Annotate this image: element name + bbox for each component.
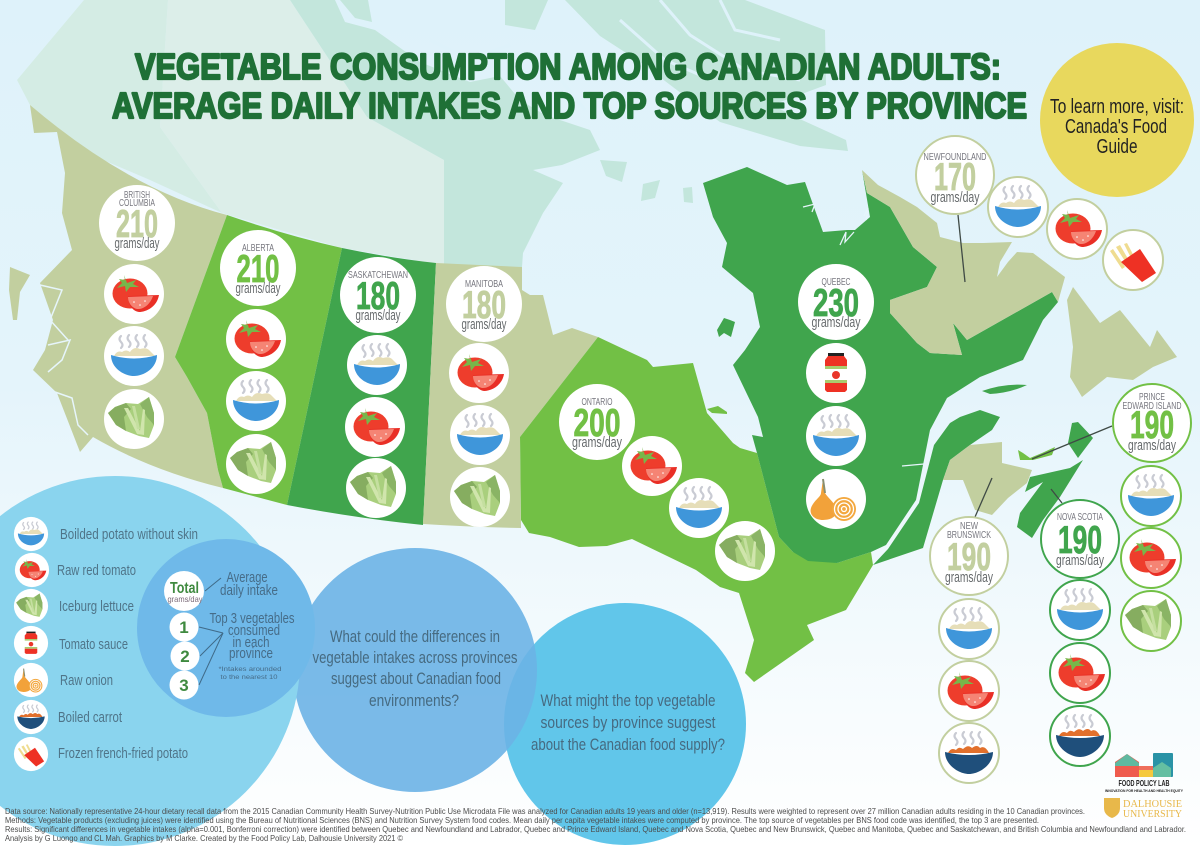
province: British Columbia	[9, 105, 227, 488]
key: connector lines	[199, 578, 223, 685]
icon: lettuce	[104, 389, 164, 449]
Akimiski island	[707, 406, 727, 414]
legend item: tomato sauce: Tomato sauce	[59, 637, 128, 653]
icon: boiled potato	[939, 599, 999, 659]
legend item: french fries	[14, 737, 188, 771]
panel: how to read	[137, 539, 315, 717]
key: rounding note: *Intakes arounded	[218, 666, 282, 673]
stat: Ontario total	[559, 384, 635, 460]
icon: boiled potato	[1121, 466, 1181, 526]
stat: Ontario total: 200	[574, 402, 620, 445]
stat: Alberta total	[220, 230, 296, 306]
province: Newfoundland and Labrador	[862, 170, 1177, 397]
question two text: about the Canadian food supply?	[531, 736, 725, 754]
stat: British Columbia total: 210	[116, 203, 158, 246]
stat: Newfoundland total: NEWFOUNDLAND	[923, 151, 987, 163]
question two text	[531, 692, 725, 754]
key: top 3 vegetables text: Top 3 vegetables	[210, 611, 294, 627]
panel: question two	[504, 603, 746, 845]
stat: New Brunswick total: BRUNSWICK	[947, 529, 991, 541]
legend item: onion: Raw onion	[60, 673, 113, 689]
logo: Food Policy Lab: INNOVATION FOR HEALTH AND HEALTH EQUITY	[1105, 788, 1183, 793]
stat: British Columbia total: COLUMBIA	[119, 197, 155, 209]
province: Saskatchewan	[287, 248, 436, 525]
legend item: onion	[14, 663, 113, 697]
panel: Quebec	[798, 264, 874, 529]
icon: boiled potato	[226, 371, 286, 431]
callout: Canada's Food Guide: Guide	[1096, 136, 1138, 158]
legend item: tomato: Raw red tomato	[57, 563, 136, 579]
leader lines to Atlantic provinces	[958, 215, 1112, 517]
stat: Saskatchewan total: SASKATCHEWAN	[348, 269, 408, 281]
footnotes	[5, 806, 1186, 843]
callout: Canada's Food Guide: Canada's Food	[1065, 116, 1167, 138]
legend item: carrot	[14, 700, 122, 734]
Quebec rivers	[803, 204, 924, 466]
panel: question one: vegetable intakes across provinces	[312, 649, 518, 667]
province: Nova Scotia	[1017, 422, 1093, 538]
legend item: carrot: Boiled carrot	[58, 710, 122, 726]
icon: lettuce	[715, 521, 775, 581]
map of Canada	[9, 0, 1177, 682]
icon: boiled carrot	[939, 723, 999, 783]
legend item: lettuce	[14, 589, 134, 623]
icon: tomato	[449, 343, 509, 403]
panel: British Columbia	[99, 185, 175, 449]
panel: Saskatchewan	[340, 257, 416, 518]
stat: British Columbia total	[99, 185, 175, 261]
key: average daily intake text: Average	[226, 570, 268, 586]
logo: Dalhousie University: UNIVERSITY	[1123, 809, 1182, 820]
stat: Newfoundland total: 170	[934, 156, 976, 199]
province: Manitoba	[423, 263, 598, 528]
stat: Alberta total: 210	[236, 248, 280, 291]
water channels in the Arctic	[430, 0, 800, 110]
territory: Yukon	[17, 0, 222, 213]
key: average daily intake text	[220, 570, 278, 599]
icon: boiled carrot	[1050, 706, 1110, 766]
logo: Food Policy Lab	[1105, 753, 1183, 793]
icon: tomato sauce	[806, 343, 866, 403]
stat: Newfoundland total: grams/day	[930, 189, 980, 206]
icon: tomato	[104, 264, 164, 324]
province: Alberta	[175, 215, 342, 505]
legend item: boiled potato	[14, 517, 198, 551]
province: Prince Edward Island	[1018, 447, 1055, 460]
legend item: tomato	[15, 553, 136, 587]
key: rounding note: to the nearest 10	[220, 674, 278, 681]
icon: tomato	[622, 436, 682, 496]
stat: Manitoba total: grams/day	[462, 316, 507, 333]
stat: Ontario total: ONTARIO	[582, 396, 612, 408]
stat: Quebec total: grams/day	[812, 314, 861, 331]
question two text: What might the top vegetable	[540, 692, 716, 710]
stat: PEI total: PRINCE	[1139, 391, 1165, 403]
icon: onion	[806, 469, 866, 529]
stat: Quebec total	[798, 264, 874, 340]
key: rounding note	[218, 666, 282, 681]
stat: Nova Scotia total: grams/day	[1056, 552, 1104, 569]
key: rank circles: 3	[179, 676, 189, 695]
stat: New Brunswick total: 190	[947, 536, 991, 579]
icon: boiled potato	[104, 326, 164, 386]
stat: Nova Scotia total: 190	[1058, 519, 1102, 562]
key: top 3 vegetables text: in each	[232, 635, 270, 651]
panel: Newfoundland	[916, 136, 1163, 290]
panel: Alberta	[220, 230, 296, 494]
panel: question one: What could the differences in	[330, 628, 500, 646]
stat: Saskatchewan total: grams/day	[356, 307, 401, 324]
icon: boiled potato	[669, 478, 729, 538]
icon: lettuce	[346, 458, 406, 518]
stat: PEI total: grams/day	[1128, 437, 1176, 454]
icon: boiled potato	[988, 177, 1048, 237]
title: AVERAGE DAILY INTAKES AND TOP SOURCES BY PROVINCE	[112, 85, 1027, 126]
key: rank circles	[170, 612, 200, 700]
territory: Northwest Territories	[160, 0, 444, 265]
stat: Manitoba total: MANITOBA	[465, 278, 503, 290]
title: VEGETABLE CONSUMPTION AMONG CANADIAN ADULTS:	[135, 46, 1001, 87]
panel: question one: suggest about Canadian food	[331, 670, 501, 688]
stat: Nova Scotia total	[1041, 500, 1119, 578]
icon: french fries	[1103, 230, 1163, 290]
callout: Canada's Food Guide	[1040, 43, 1194, 197]
key: top 3 vegetables text: consumed	[228, 623, 280, 639]
territory: Nunavut	[290, 0, 848, 267]
stat: Saskatchewan total	[340, 257, 416, 333]
province: Ontario	[520, 337, 873, 682]
stat: Manitoba total: 180	[462, 284, 506, 327]
icon: tomato	[1047, 199, 1107, 259]
panel: Manitoba	[446, 266, 522, 527]
title	[112, 46, 1027, 126]
key: top 3 vegetables text	[210, 611, 294, 662]
legend item: tomato sauce	[14, 626, 128, 660]
icon: lettuce	[1121, 591, 1181, 651]
panel: question one: environments?	[369, 692, 459, 710]
icon: boiled potato	[450, 405, 510, 465]
stat: British Columbia total: grams/day	[114, 235, 160, 252]
stat: Quebec total: 230	[813, 282, 859, 325]
stat: PEI total: 190	[1130, 404, 1174, 447]
footnotes: Analysis by G Luongo and CL Mah. Graphics by M Clarke. Created by the Food Policy Lab, Dalhousie University 2021 ©	[5, 833, 404, 843]
icon: tomato	[939, 661, 999, 721]
panel: legend	[0, 476, 300, 846]
stat: Alberta total: ALBERTA	[242, 242, 274, 254]
stat: Alberta total: grams/day	[236, 280, 281, 297]
key: average daily intake text: daily intake	[220, 583, 278, 599]
panel: New Brunswick	[930, 517, 1008, 783]
British Columbia coastal inlets	[40, 285, 88, 435]
key: total circle: grams/day	[168, 594, 203, 604]
stat: Nova Scotia total: NOVA SCOTIA	[1057, 511, 1103, 523]
stat: Quebec total: QUEBEC	[822, 276, 851, 288]
stat: New Brunswick total: NEW	[960, 520, 978, 532]
stat: PEI total	[1113, 384, 1191, 462]
footnotes: Methods: Vegetable products (excluding juices) were identified using the Bureau of Nutritional Sciences (BNS) and Nutrition Survey System food codes. Mean daily per capita vegetable intakes were computed by province. The top source of vegetables per BNS food code was identified, the top 3 are presented.	[5, 815, 1039, 825]
legend item: boiled potato: Boilded potato without skin	[60, 527, 198, 543]
key: rank circles: 1	[179, 618, 189, 637]
icon: lettuce	[226, 434, 286, 494]
key: total circle: Total	[170, 580, 199, 597]
panel: Nova Scotia	[1041, 500, 1119, 766]
stat: Saskatchewan total: 180	[356, 275, 400, 318]
icon: tomato	[1121, 528, 1181, 588]
logo: Food Policy Lab: FOOD POLICY LAB	[1118, 778, 1170, 788]
panel: Prince Edward Island	[1113, 384, 1191, 651]
legend item: lettuce: Iceburg lettuce	[59, 599, 134, 615]
key: total circle	[164, 571, 204, 611]
question two text: sources by province suggest	[540, 714, 716, 732]
panel: Ontario	[559, 384, 775, 581]
key: top 3 vegetables text: province	[229, 646, 273, 662]
icon: tomato	[345, 397, 405, 457]
stat: Manitoba total	[446, 266, 522, 342]
stat: British Columbia total: BRITISH	[124, 189, 150, 201]
icon: boiled potato	[806, 406, 866, 466]
icon: lettuce	[450, 467, 510, 527]
stat: Ontario total: grams/day	[572, 434, 622, 451]
icon: tomato	[226, 309, 286, 369]
icon: tomato	[1050, 643, 1110, 703]
legend item: french fries: Frozen french-fried potato	[58, 746, 188, 762]
icon: boiled potato	[1050, 580, 1110, 640]
logo: Dalhousie University	[1104, 798, 1182, 820]
logo: Dalhousie University: DALHOUSIE	[1123, 799, 1182, 810]
stat: New Brunswick total: grams/day	[945, 569, 993, 586]
stat: Newfoundland total	[916, 136, 994, 214]
icon: boiled potato	[347, 335, 407, 395]
panel: question one	[293, 548, 537, 792]
stat: New Brunswick total	[930, 517, 1008, 595]
province: New Brunswick	[943, 442, 1032, 515]
province: Quebec	[703, 167, 1058, 565]
key: rank circles: 2	[180, 647, 190, 666]
